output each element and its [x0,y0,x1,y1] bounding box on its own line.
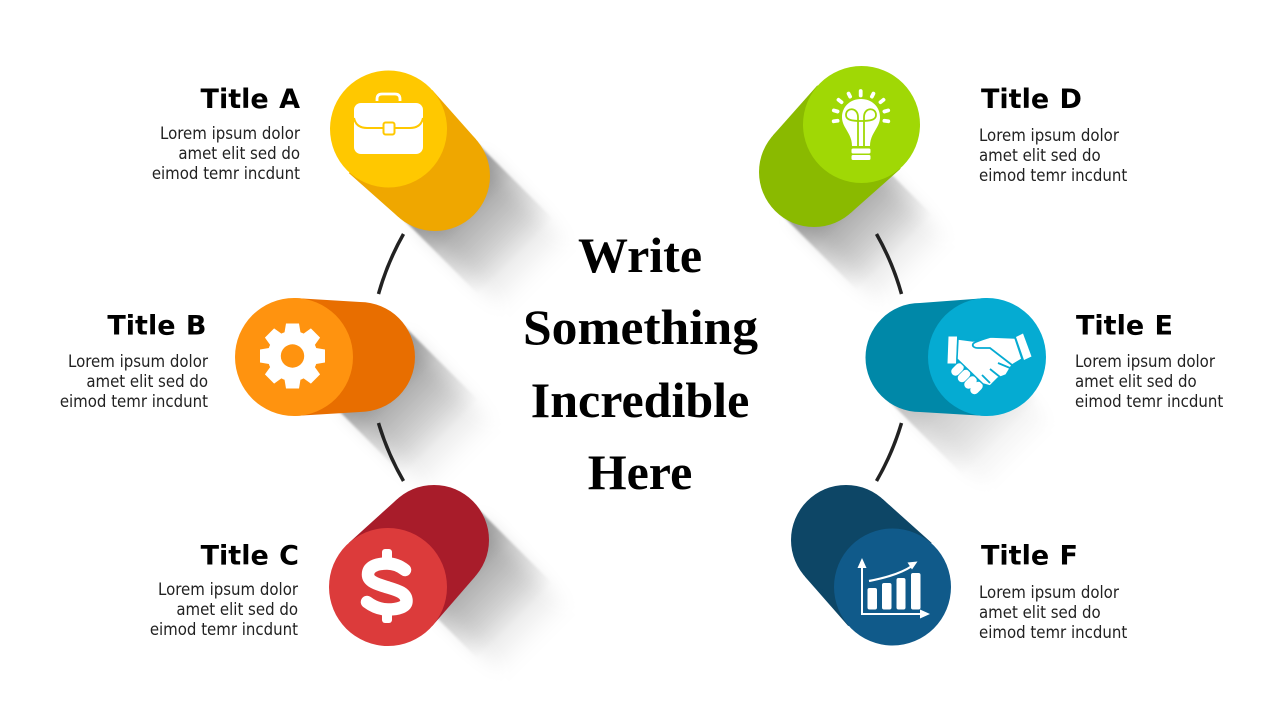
panel: item B [60,298,500,497]
panel: item E [866,298,1223,497]
text: description E: amet elit sed do [1075,372,1197,391]
panel: item D [759,66,1127,312]
shadow B [323,320,500,497]
panel: item A [152,70,575,316]
text: description B: amet elit sed do [86,372,208,391]
icon: handshake [948,334,1032,390]
text: description D: eimod temr incdunt [979,166,1127,185]
title: central message [523,227,758,500]
cylinder D [759,66,920,227]
text: description E: eimod temr incdunt [1075,392,1223,411]
title: central message: Incredible [531,372,749,428]
text: description A: eimod temr incdunt [152,164,300,183]
connector arcs [378,234,902,481]
shadow D [777,135,954,312]
icon: dollar sign [367,549,406,623]
title: central message: Something [523,299,758,355]
title: central message: Here [588,444,692,500]
shadow E [883,320,1060,497]
panel: item F [791,485,1127,646]
cylinder E [866,298,1046,416]
text: description B: Lorem ipsum dolor [68,352,209,371]
icon: growth chart [858,558,930,618]
text: description F: eimod temr incdunt [979,623,1127,642]
heading: Title C: Title C [201,540,299,572]
heading: Title A: Title A [201,84,300,115]
shadow A [398,139,575,316]
heading: Title B: Title B [107,310,206,342]
heading: Title F: Title F [981,540,1078,572]
text: description F: amet elit sed do [979,603,1101,622]
text: description C: amet elit sed do [176,600,298,619]
heading: Title D: Title D [981,84,1082,115]
icon: light bulb [834,91,888,160]
heading: Title E: Title E [1076,310,1173,342]
text: description D: amet elit sed do [979,146,1101,165]
text: description B: eimod temr incdunt [60,392,208,411]
text: description D: Lorem ipsum dolor [979,126,1120,145]
title: central message: Write [578,227,702,283]
cylinder B [235,298,415,416]
cylinder A [330,70,490,231]
text: description A: Lorem ipsum dolor [160,124,301,143]
cylinder C [329,485,489,646]
text: description C: Lorem ipsum dolor [158,580,299,599]
cylinder F [791,485,951,646]
icon: gear [260,324,325,388]
text: description C: eimod temr incdunt [150,620,298,639]
icon: briefcase [354,94,423,154]
text: description A: amet elit sed do [178,144,300,163]
text: description F: Lorem ipsum dolor [979,583,1120,602]
panel: item C [150,485,574,680]
text: description E: Lorem ipsum dolor [1075,352,1216,371]
shadow C [397,503,574,680]
